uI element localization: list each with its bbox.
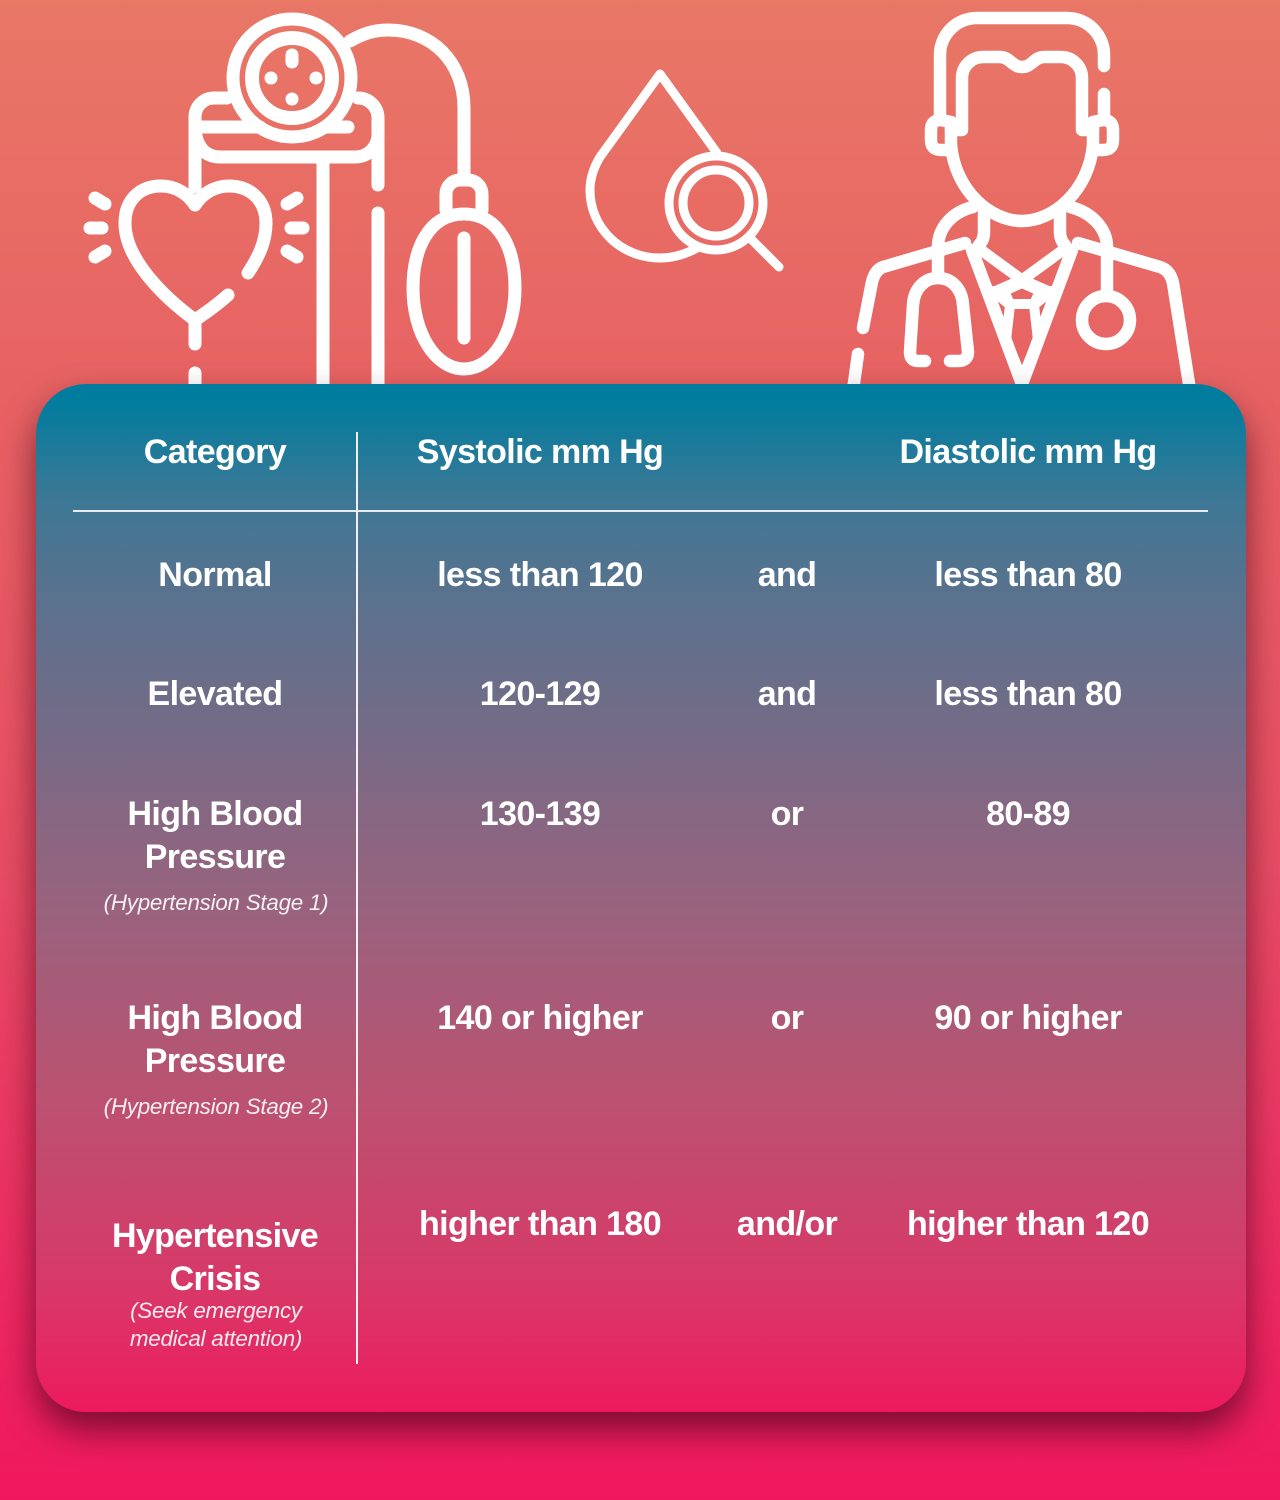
row: stage 1 label line 1: High Blood — [127, 795, 303, 833]
row: normal connector: and — [758, 556, 816, 594]
heading: category: Category — [144, 433, 286, 471]
divider line: header — [73, 510, 1208, 512]
icon: blood drop with magnifier — [590, 74, 779, 267]
heading: systolic: Systolic mm Hg — [417, 433, 663, 471]
row: elevated systolic: 120-129 — [480, 675, 600, 713]
row: stage 2 label line 2: Pressure — [145, 1042, 285, 1080]
row: crisis note line 2: medical attention) — [130, 1326, 302, 1351]
row: stage 2 note: (Hypertension Stage 2) — [104, 1094, 328, 1119]
row: crisis label line 2: Crisis — [170, 1260, 260, 1298]
row: stage 2 systolic: 140 or higher — [437, 999, 643, 1037]
row: crisis note line 1: (Seek emergency — [130, 1298, 302, 1323]
icon: heart with pulse — [90, 186, 303, 390]
row: elevated diastolic: less than 80 — [934, 675, 1122, 713]
row: stage 2 label line 1: High Blood — [127, 999, 303, 1037]
row: crisis connector: and/or — [737, 1205, 837, 1243]
row: stage 2 diastolic: 90 or higher — [934, 999, 1122, 1037]
divider line: category column — [356, 432, 358, 1364]
row: stage 1 diastolic: 80-89 — [986, 795, 1070, 833]
illustration icons row — [84, 12, 1196, 384]
row: elevated connector: and — [758, 675, 816, 713]
row: stage 1 systolic: 130-139 — [480, 795, 600, 833]
row: crisis diastolic: higher than 120 — [907, 1205, 1149, 1243]
row: normal label: Normal — [158, 556, 272, 594]
row: stage 1 note: (Hypertension Stage 1) — [104, 890, 328, 915]
icon: blood pressure monitor — [195, 19, 515, 390]
row: elevated label: Elevated — [148, 675, 282, 713]
row: crisis systolic: higher than 180 — [419, 1205, 661, 1243]
row: stage 2 connector: or — [771, 999, 803, 1037]
icon: doctor with stethoscope — [853, 18, 1190, 390]
row: normal diastolic: less than 80 — [934, 556, 1122, 594]
row: crisis label line 1: Hypertensive — [112, 1217, 318, 1255]
panel: blood pressure table — [36, 384, 1246, 1412]
row: normal systolic: less than 120 — [437, 556, 643, 594]
row: stage 1 connector: or — [771, 795, 803, 833]
row: stage 1 label line 2: Pressure — [145, 838, 285, 876]
heading: diastolic: Diastolic mm Hg — [899, 433, 1157, 471]
